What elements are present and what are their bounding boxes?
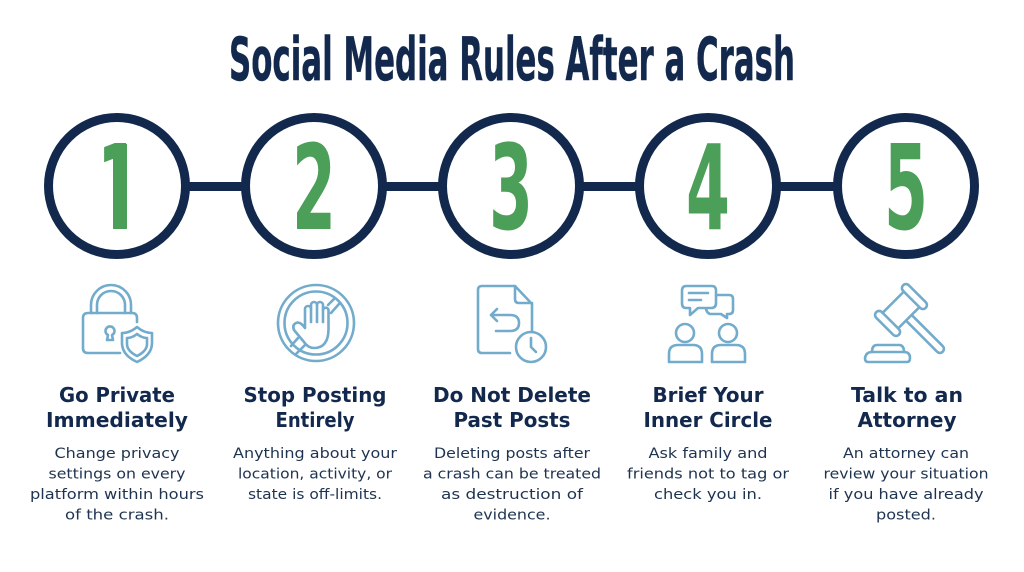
column 1 heading: Immediately	[46, 408, 188, 432]
icon: gavel	[865, 282, 959, 368]
column 1 text: of the crash.	[65, 508, 169, 524]
column 3 text: as destruction of	[441, 487, 584, 503]
column 3 heading: Past Posts	[454, 408, 570, 432]
step 5 circle	[838, 118, 974, 257]
column 3 text: Deleting posts after	[434, 446, 590, 462]
column 4 text: friends not to tag or	[627, 466, 789, 482]
column 3 heading: Do Not Delete	[433, 383, 591, 407]
column 2 text: Anything about your	[233, 446, 397, 462]
column 2 heading: Stop Posting	[244, 383, 386, 407]
icon: document with undo arrow and clock	[478, 286, 546, 362]
step 1 circle	[48, 118, 186, 257]
connector line	[180, 182, 850, 191]
column 2 heading	[244, 383, 386, 432]
icon: padlock with shield	[83, 285, 152, 362]
column 1 heading	[46, 383, 188, 432]
column 3 text: a crash can be treated	[423, 466, 601, 482]
column 2 text	[233, 446, 397, 503]
column 1 text	[30, 446, 204, 524]
column 5 heading: Talk to an	[851, 383, 963, 407]
column 4 heading: Brief Your	[652, 383, 764, 407]
column 1 heading: Go Private	[59, 383, 175, 407]
column 5 text: if you have already	[828, 487, 984, 503]
column 2 text: location, activity, or	[238, 466, 392, 482]
column 1 text: platform within hours	[30, 487, 204, 503]
column 3 text: evidence.	[474, 508, 550, 524]
step 4 circle	[640, 118, 776, 257]
column 4 heading	[644, 383, 772, 432]
column 5 heading	[851, 383, 963, 432]
column 5 text: posted.	[876, 508, 936, 524]
step 3 circle: 3	[489, 119, 533, 257]
column 4 text: Ask family and	[648, 446, 768, 462]
column 3 text	[423, 446, 601, 524]
step 3 circle	[442, 118, 580, 257]
icon: two people with chat bubbles	[669, 286, 745, 362]
column 5 heading: Attorney	[858, 408, 956, 432]
column 5 text	[824, 446, 988, 524]
step 4 circle: 4	[686, 119, 730, 257]
column 2 text: state is off-limits.	[248, 487, 382, 503]
step circles and numbers	[48, 118, 974, 257]
step 1 circle: 1	[97, 119, 141, 257]
step 2 circle: 2	[292, 119, 336, 257]
column 5 text: An attorney can	[843, 446, 969, 462]
column 2 heading: Entirely	[276, 408, 354, 432]
column 4 heading: Inner Circle	[644, 408, 772, 432]
column 4 text	[627, 446, 789, 503]
column 4 text: check you in.	[654, 487, 762, 503]
column 1 text: Change privacy	[54, 446, 180, 462]
step 5 circle: 5	[884, 119, 928, 257]
column 1 text: settings on every	[48, 466, 186, 482]
column 3 heading	[433, 383, 591, 432]
column 5 text: review your situation	[824, 466, 988, 482]
step 2 circle	[246, 118, 382, 257]
icon: no hand sign	[278, 285, 354, 361]
